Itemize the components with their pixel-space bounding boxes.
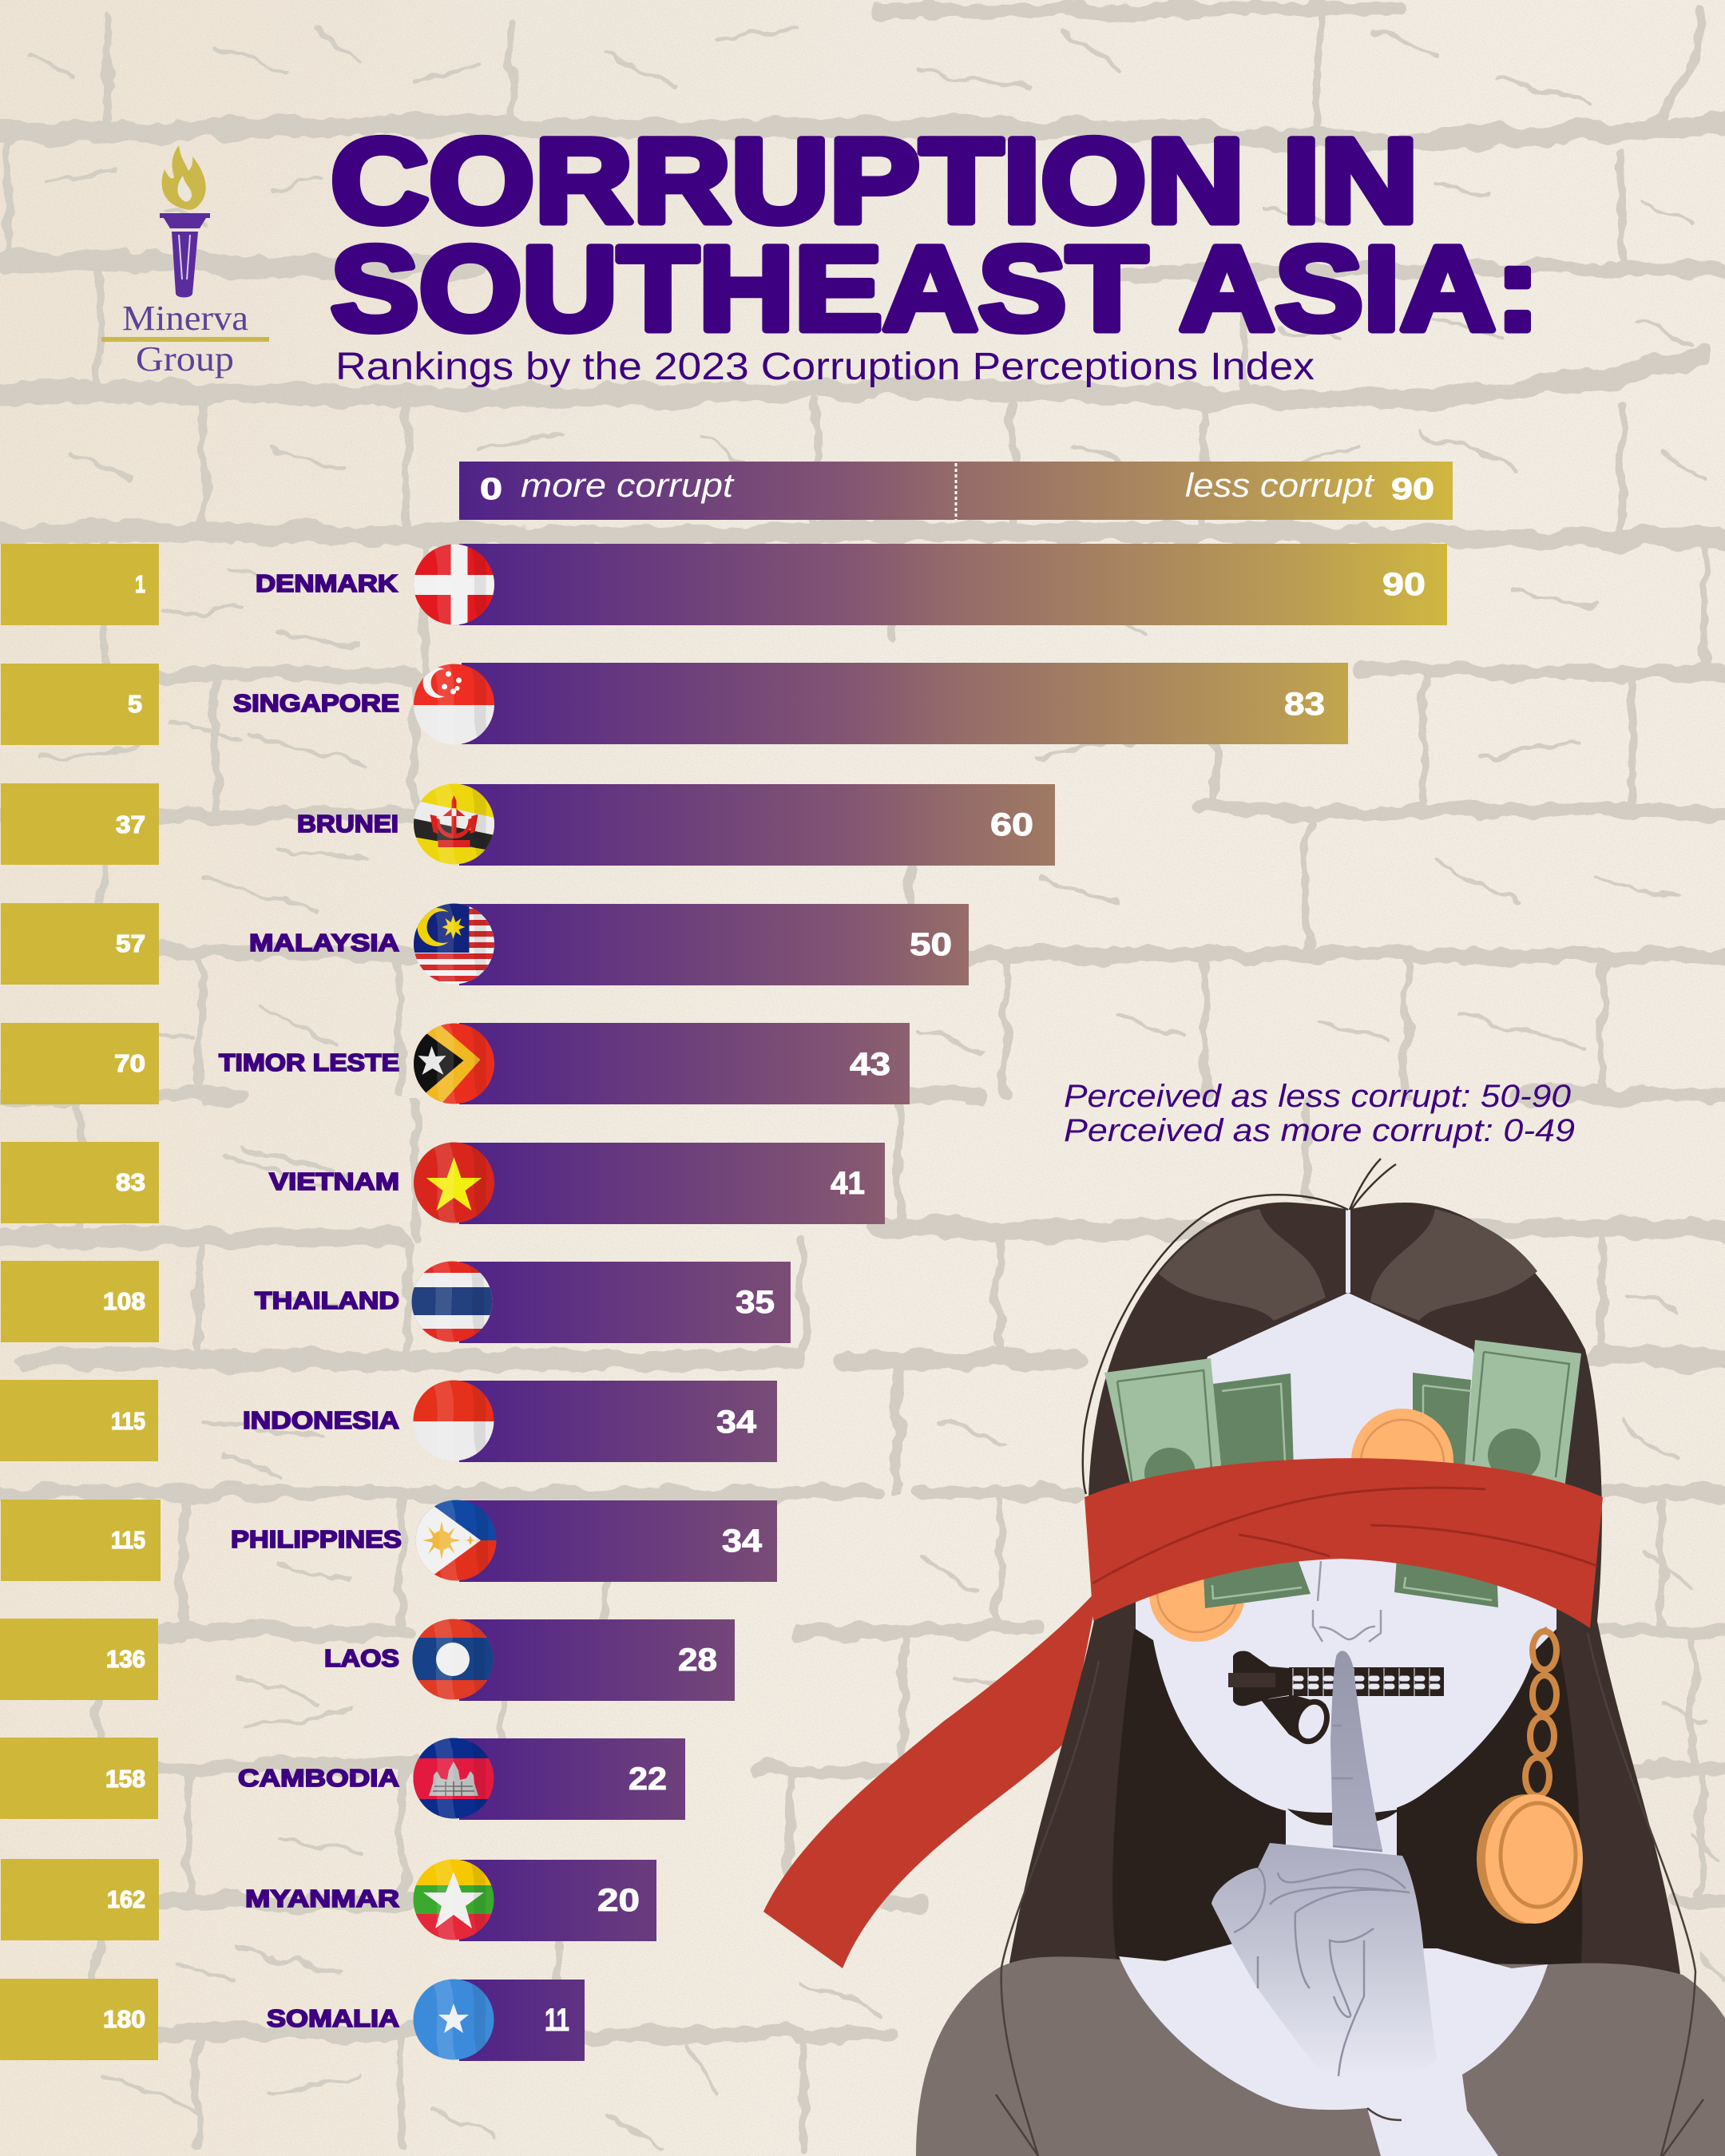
zipper mouth — [1228, 1651, 1444, 1750]
row: Indonesia: INDONESIA — [243, 1406, 399, 1434]
wordmark: Group: Group — [136, 339, 234, 378]
row: Thailand: 35 — [736, 1285, 775, 1320]
row: Philippines: 115 — [111, 1526, 145, 1554]
row: Laos: LAOS — [324, 1644, 399, 1672]
note: perception ranges: Perceived as more corrupt: 0-49 — [1064, 1113, 1575, 1148]
row: Philippines: PHILIPPINES — [231, 1525, 402, 1553]
row: Singapore: 83 — [1284, 687, 1325, 722]
stray hair outline — [1083, 1159, 1396, 1494]
scale legend bar: less corrupt — [1185, 466, 1376, 504]
note: perception ranges — [1064, 1079, 1575, 1148]
face — [1136, 1293, 1556, 1819]
row: Brunei: 60 — [990, 807, 1033, 842]
row: Malaysia — [1, 900, 969, 988]
row: Somalia: 11 — [545, 2003, 569, 2038]
logo divider — [101, 337, 269, 342]
row: Singapore — [1, 660, 1348, 748]
subtitle: Rankings by the 2023 Corruption Perceptions Index — [335, 346, 1315, 388]
money: left notes — [1104, 1358, 1294, 1499]
row: Laos: 28 — [678, 1643, 717, 1678]
hair highlights — [1159, 1209, 1326, 1321]
row: Denmark: 1 — [135, 570, 145, 598]
neck and chest — [1119, 1789, 1548, 2156]
row: Thailand: THAILAND — [255, 1286, 399, 1314]
row: Denmark: DENMARK — [256, 569, 399, 597]
row: Myanmar: MYANMAR — [245, 1885, 399, 1912]
row: Timor Leste: TIMOR LESTE — [219, 1048, 399, 1076]
row: Vietnam: 41 — [831, 1166, 865, 1201]
logo: Minerva Group torch — [101, 145, 269, 378]
wordmark: Minerva: Minerva — [122, 299, 248, 338]
row: Laos: 136 — [106, 1645, 145, 1673]
title: SOUTHEAST ASIA: — [331, 221, 1540, 355]
title — [331, 113, 1540, 355]
icon: torch — [160, 145, 210, 297]
blindfold tail — [763, 1589, 1098, 1968]
hand — [1211, 1651, 1438, 2079]
row: Brunei: BRUNEI — [297, 810, 399, 838]
row: Laos — [0, 1615, 735, 1703]
row: Cambodia: 158 — [105, 1765, 145, 1793]
illustration: blindfolded woman — [763, 1159, 1725, 2156]
row: Malaysia: MALAYSIA — [249, 929, 399, 957]
row: Vietnam — [1, 1139, 885, 1227]
row: Cambodia: 22 — [629, 1762, 667, 1797]
row: Denmark: 90 — [1382, 567, 1426, 602]
row: Thailand — [1, 1258, 791, 1346]
hair parting — [1346, 1210, 1350, 1293]
money below blindfold — [1149, 1546, 1498, 1642]
row: Myanmar — [1, 1856, 656, 1944]
row: Somalia: SOMALIA — [267, 2004, 399, 2032]
scale legend bar: 0 — [480, 473, 502, 506]
row: Indonesia — [0, 1377, 777, 1464]
money: right notes and coin — [1351, 1340, 1581, 1512]
row: Denmark — [1, 541, 1447, 628]
scale legend bar — [459, 462, 1453, 520]
face lines: nose — [1313, 1561, 1381, 1642]
row: Philippines: 34 — [722, 1524, 763, 1559]
row: Philippines — [1, 1492, 777, 1588]
row: Indonesia: 115 — [111, 1407, 145, 1435]
hair — [1008, 1203, 1681, 1980]
row: Somalia — [0, 1976, 585, 2063]
row: Vietnam: VIETNAM — [269, 1167, 399, 1195]
scale legend bar: more corrupt — [521, 466, 736, 504]
blindfold — [1085, 1458, 1603, 1628]
long stray hairs and sleeve lines — [996, 1633, 1703, 2156]
inner hair shadow — [1112, 1621, 1582, 1966]
row: Thailand: 108 — [103, 1287, 145, 1315]
scale legend bar: 90 — [1391, 473, 1434, 506]
row: Somalia: 180 — [103, 2005, 145, 2033]
row: Timor Leste: 43 — [850, 1047, 890, 1082]
row: Cambodia: CAMBODIA — [238, 1764, 399, 1792]
row: Vietnam: 83 — [116, 1168, 145, 1196]
title: CORRUPTION IN — [331, 113, 1418, 248]
row: Singapore: SINGAPORE — [233, 689, 399, 717]
medallion — [1477, 1794, 1583, 1924]
row: Timor Leste: 70 — [114, 1049, 145, 1077]
row: Brunei — [1, 780, 1055, 868]
row: Malaysia: 50 — [910, 927, 952, 962]
row: Myanmar: 162 — [107, 1885, 145, 1913]
row: Myanmar: 20 — [597, 1883, 640, 1918]
row: Singapore: 5 — [128, 690, 142, 718]
row: Cambodia — [0, 1734, 685, 1822]
row: Indonesia: 34 — [716, 1405, 757, 1440]
row: Brunei: 37 — [116, 810, 145, 838]
row: Timor Leste — [1, 1020, 910, 1108]
chin shadow — [1287, 1809, 1399, 1825]
row: Malaysia: 57 — [116, 929, 145, 957]
chain — [1525, 1629, 1556, 1796]
note: perception ranges: Perceived as less corrupt: 50-90 — [1064, 1079, 1571, 1114]
clothes — [916, 1956, 1725, 2156]
